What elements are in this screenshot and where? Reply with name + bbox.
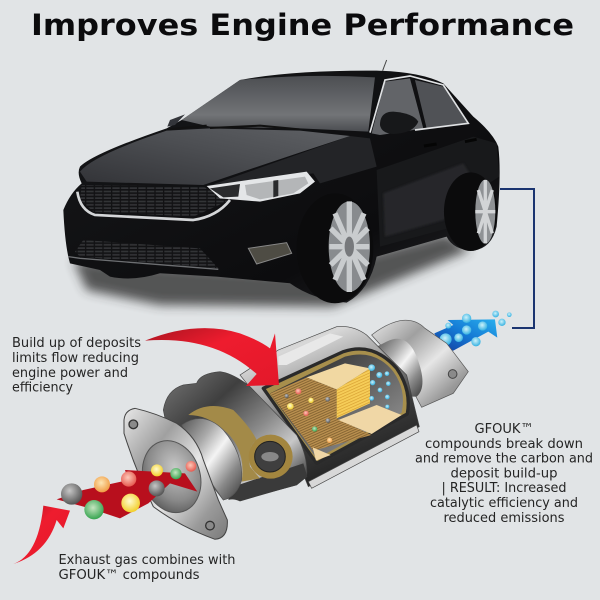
side windows	[372, 78, 423, 135]
chrome window trim	[370, 76, 468, 133]
car body	[63, 71, 500, 303]
text: deposits: efficiency	[12, 380, 73, 396]
fender highlight	[207, 136, 377, 187]
cutaway gold rim	[263, 349, 408, 463]
interior particles	[285, 364, 391, 443]
shell bottom lip	[308, 425, 419, 488]
lower grille trim	[68, 257, 218, 269]
car photo	[63, 60, 500, 307]
antenna	[383, 60, 387, 71]
windshield	[182, 76, 375, 132]
text: GFOUK result: reduced emissions	[444, 510, 564, 526]
gold band	[188, 406, 260, 482]
big red arrow	[145, 328, 279, 386]
honeycomb face	[270, 377, 372, 451]
text: deposits: Build up of deposits	[12, 336, 141, 351]
text: deposits: engine power and	[12, 366, 128, 381]
text: GFOUK result: GFOUK™	[474, 421, 534, 437]
small red arrow	[13, 506, 70, 564]
bulb dark underside	[228, 463, 307, 501]
body reflection	[383, 163, 472, 237]
gas balls	[61, 461, 196, 519]
car shadow	[73, 233, 470, 307]
left mirror	[167, 114, 185, 127]
text: GFOUK result: compounds break down	[425, 436, 583, 452]
front rim	[329, 201, 370, 292]
front bulb housing	[163, 372, 307, 500]
headlight interior	[245, 177, 308, 199]
door handles	[424, 139, 477, 146]
main shell	[240, 326, 419, 487]
right mirror	[380, 112, 418, 134]
chrome grille trim	[77, 192, 230, 220]
catalyst block top	[307, 363, 370, 389]
rear tire	[444, 172, 497, 251]
outlet pipe	[377, 339, 422, 397]
wipers	[168, 126, 299, 129]
fog lamp	[248, 243, 292, 264]
text: GFOUK result	[415, 421, 593, 526]
text: GFOUK result: | RESULT: Increased	[442, 480, 566, 496]
text: deposits	[12, 336, 141, 396]
text: exhaust: GFOUK™ compounds	[58, 568, 200, 583]
inlet opening	[133, 433, 210, 520]
rear door panel	[377, 137, 499, 247]
text: exhaust	[58, 553, 236, 583]
gas arrow	[57, 470, 197, 518]
text: GFOUK result: and remove the carbon and	[415, 451, 593, 467]
hood	[80, 128, 350, 185]
text: GFOUK result: deposit build-up	[450, 465, 558, 481]
upper tube highlight	[278, 333, 343, 365]
headlight divider	[210, 180, 278, 197]
lower flange hole	[206, 521, 214, 530]
flange bolt	[448, 370, 457, 378]
grille	[80, 185, 230, 217]
catalyst floor	[338, 405, 402, 434]
catalyst floor left	[313, 447, 331, 461]
inlet flange	[124, 408, 227, 539]
inlet pipe	[182, 419, 242, 500]
cutaway interior	[270, 354, 403, 459]
lower grille	[75, 240, 218, 268]
title: Improves Engine Performance	[31, 8, 574, 42]
catalytic converter	[124, 311, 512, 539]
text: exhaust: Exhaust gas combines with	[58, 553, 236, 568]
text: GFOUK result: catalytic efficiency and	[430, 495, 578, 511]
catalyst block side	[337, 368, 370, 418]
oxygen sensor	[249, 435, 293, 479]
headlight	[207, 172, 315, 202]
text: deposits: limits flow reducing	[12, 351, 139, 366]
flange holes	[129, 420, 138, 429]
blue outlet arrow	[434, 311, 512, 351]
front tire	[297, 193, 373, 303]
connector line	[500, 189, 534, 328]
gas stream	[13, 461, 197, 564]
outlet flange	[372, 320, 468, 407]
rear rim	[475, 180, 495, 244]
